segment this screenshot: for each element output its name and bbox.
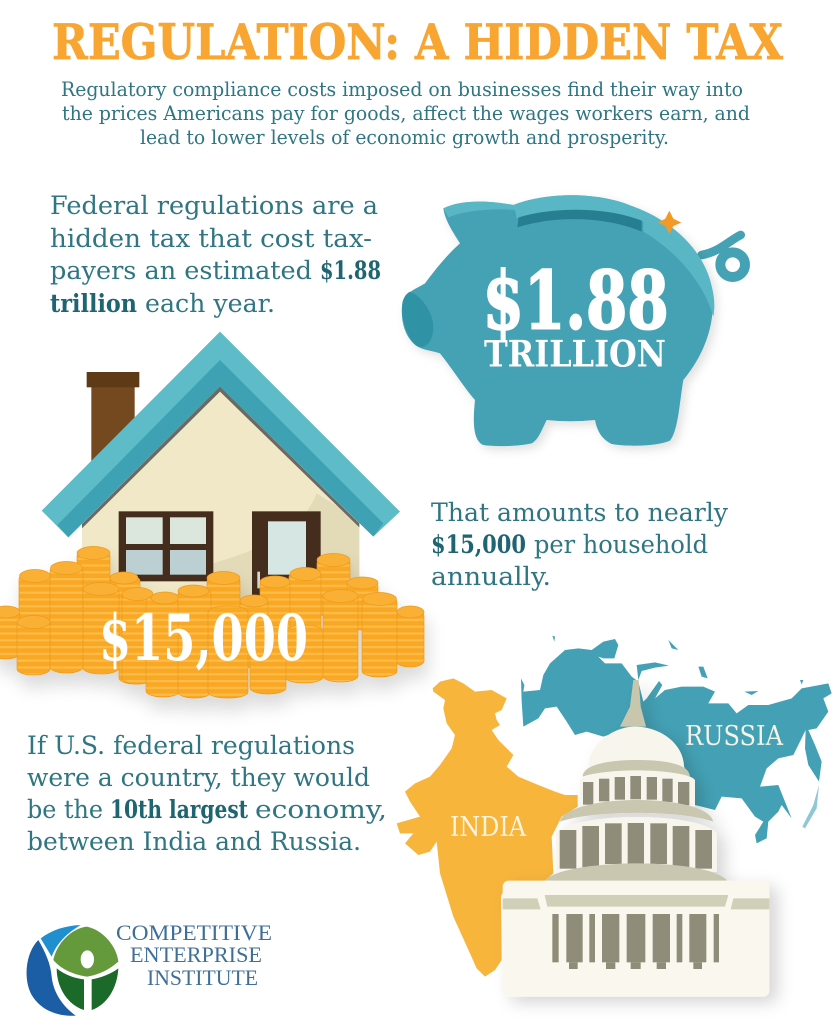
russia label: RUSSIA (685, 721, 783, 752)
house illustration (42, 332, 400, 608)
text: federal regulations: trillion (50, 289, 137, 318)
intro text: the prices Americans pay for goods, affect the wages workers earn, and (62, 102, 750, 125)
window (119, 511, 213, 581)
text: per household: That amounts to nearly (431, 498, 729, 527)
logo mark (27, 925, 118, 1016)
logo: Competitive Enterprise Institute (27, 920, 272, 1016)
map: russia (521, 636, 832, 843)
text: per household: per household (534, 530, 708, 559)
coin stacks: back row (19, 546, 378, 681)
text: per household: $15,000 (431, 530, 526, 559)
door (252, 511, 321, 608)
house wall (82, 387, 359, 607)
text: federal regulations: hidden tax that cost tax- (50, 224, 372, 253)
capitol (503, 680, 769, 997)
text: federal regulations (50, 191, 381, 318)
coin stacks: front row (0, 582, 424, 698)
india label: INDIA (450, 812, 526, 843)
sparkle (658, 211, 681, 234)
pig body (402, 195, 713, 446)
logo: Competitive Enterprise Institute: ENTERPRISE (130, 942, 262, 967)
intro text: Regulatory compliance costs imposed on businesses find their way into (61, 78, 743, 101)
text: 10th largest economy: were a country, they would (27, 763, 370, 792)
text: federal regulations: payers an estimated (50, 256, 312, 285)
text: 10th largest economy: economy, (255, 795, 387, 824)
text: 10th largest economy (27, 731, 387, 856)
intro text (61, 78, 750, 149)
text: per household: annually. (431, 562, 551, 591)
text: federal regulations: Federal regulations are a (50, 191, 378, 220)
text: federal regulations: each year. (145, 289, 275, 318)
piggy bank (402, 195, 745, 446)
intro text: lead to lower levels of economic growth and prosperity. (140, 126, 669, 149)
logo: Competitive Enterprise Institute: INSTITUTE (147, 965, 258, 990)
map: india (397, 678, 578, 977)
household amount: $15,000 (99, 601, 308, 676)
coins (0, 546, 424, 698)
text: per household (431, 498, 729, 591)
amount: $1.88 (483, 253, 669, 347)
text: 10th largest economy: be the (27, 795, 103, 824)
trillion label: TRILLION (484, 333, 666, 376)
text: federal regulations: $1.88 (320, 256, 381, 285)
chimney (87, 372, 139, 467)
text: 10th largest economy: between India and Russia. (27, 827, 361, 856)
logo text: COMPETITIVE (116, 920, 272, 945)
roof (42, 332, 400, 537)
pig tail (702, 235, 745, 277)
text: 10th largest economy: 10th largest (110, 795, 248, 824)
text: 10th largest economy: If U.S. federal regulations (27, 731, 355, 760)
